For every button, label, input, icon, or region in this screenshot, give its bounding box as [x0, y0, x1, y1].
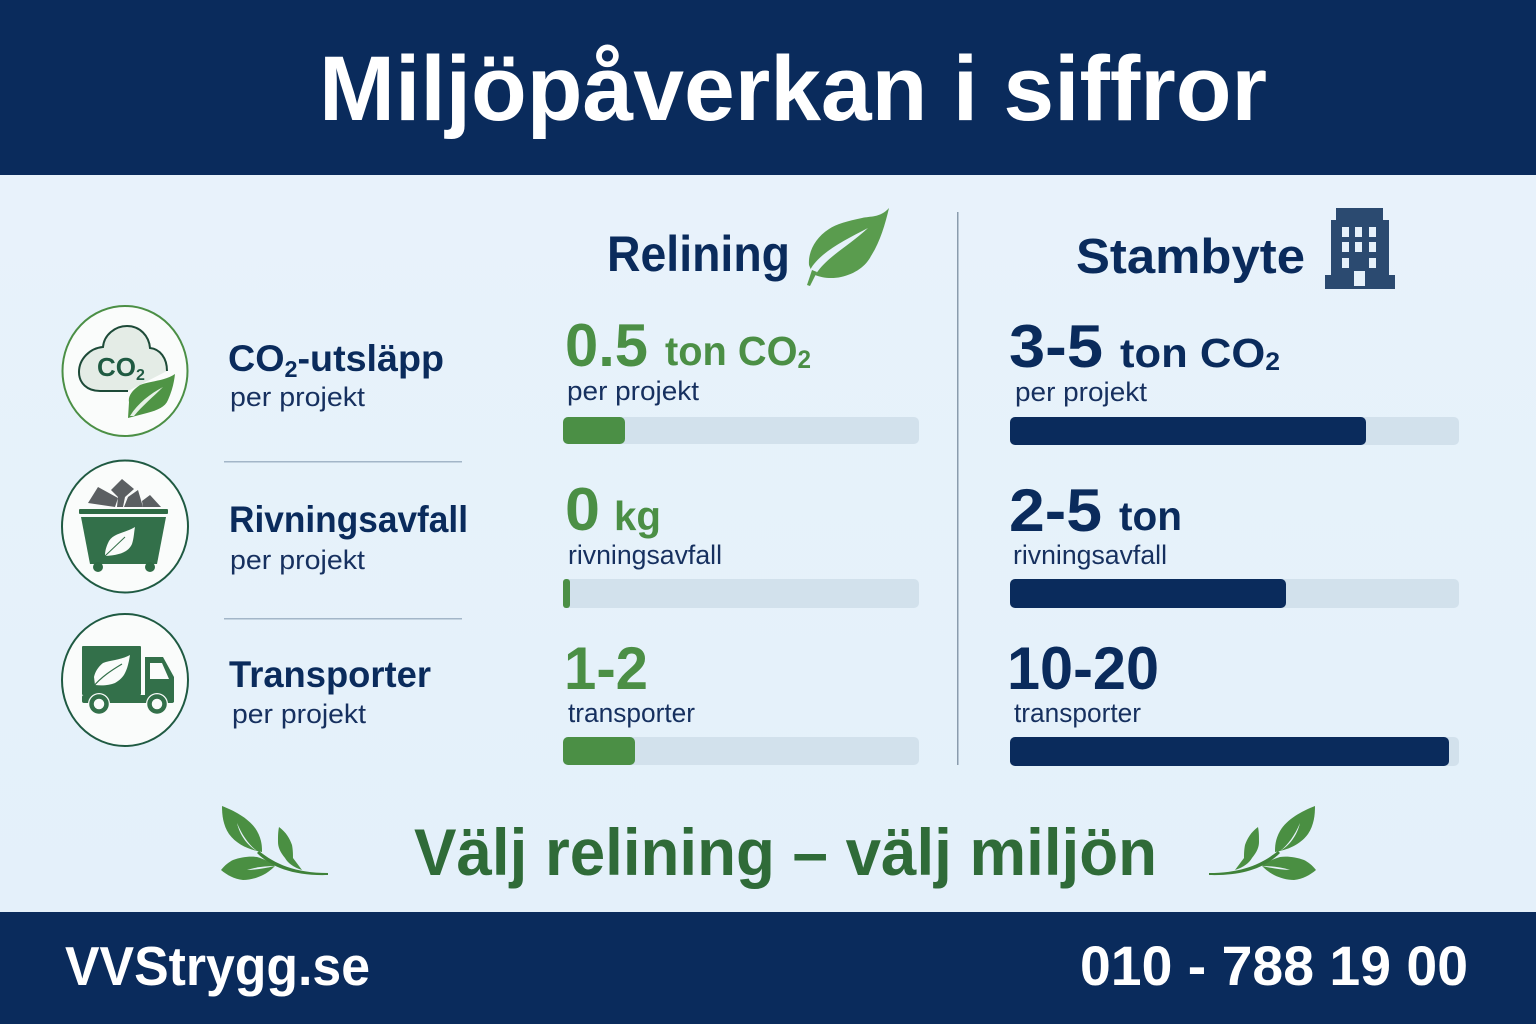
row: CO2 label — [62, 306, 444, 436]
icon: waste container — [62, 460, 188, 592]
value: 3-5 — [1009, 313, 1103, 380]
label: Transporter: Transporter — [229, 654, 431, 695]
unit: ton CO — [1120, 330, 1257, 376]
value: 0.5 — [565, 312, 648, 379]
bar fill — [1010, 737, 1449, 766]
caption: transporter — [568, 698, 695, 728]
icon: truck — [62, 614, 188, 746]
icon: CO2 cloud with leaf: 2 — [136, 367, 145, 384]
Stambyte: transport value and bar — [1007, 635, 1459, 766]
bar track — [563, 737, 919, 765]
column divider — [957, 212, 958, 765]
label: per projekt: per projekt — [232, 699, 367, 729]
icon: CO2 cloud with leaf — [62, 306, 188, 436]
bar track — [563, 579, 919, 608]
label: Rivningsavfall: Rivningsavfall — [229, 499, 468, 540]
row divider — [224, 461, 462, 462]
icon: right leaf sprig — [1209, 806, 1316, 880]
label: per projekt: per projekt — [230, 545, 366, 575]
footer band — [0, 912, 1536, 1024]
unit: kg — [614, 493, 661, 539]
website: VVStrygg.se — [65, 935, 370, 997]
icon: left leaf sprig — [221, 806, 328, 880]
row: Rivningsavfall label — [62, 460, 468, 592]
title: Miljöpåverkan i siffror — [319, 38, 1267, 140]
bar track — [1010, 417, 1459, 445]
icon: leaf — [807, 208, 889, 286]
value: 1-2 — [564, 635, 648, 702]
phone number: 010 - 788 19 00 — [1080, 934, 1468, 997]
slogan: Välj relining – välj miljön — [414, 815, 1157, 889]
value: 2-5 — [1009, 477, 1102, 544]
caption: rivningsavfall — [1013, 540, 1167, 570]
value: 0 — [565, 476, 600, 543]
Stambyte: CO2 value and bar — [1009, 313, 1459, 445]
caption: transporter — [1014, 698, 1141, 728]
caption: rivningsavfall — [568, 540, 722, 570]
column heading: Relining — [607, 208, 889, 286]
caption: per projekt — [567, 376, 700, 406]
icon: building — [1325, 208, 1395, 289]
bar track — [1010, 737, 1459, 766]
bar fill — [563, 579, 570, 608]
unit: ton — [1119, 493, 1182, 539]
label: per projekt: per projekt — [230, 382, 366, 412]
Relining: CO2 value and bar — [563, 312, 919, 444]
title banner — [0, 0, 1536, 175]
row: Transporter label — [62, 614, 431, 746]
Relining: waste value and bar — [563, 476, 919, 608]
value: 10-20 — [1007, 635, 1159, 702]
bar track — [563, 417, 919, 444]
bar fill — [1010, 417, 1366, 445]
label: CO2-utsläpp: CO — [228, 338, 284, 379]
bar track — [1010, 579, 1459, 608]
unit: 2 — [1265, 348, 1280, 376]
bar fill — [1010, 579, 1286, 608]
Relining: transport value and bar — [563, 635, 919, 765]
column heading: Relining: Relining — [607, 226, 790, 282]
icon: CO2 cloud with leaf: CO — [97, 352, 136, 382]
bar fill — [563, 737, 635, 765]
label: CO2-utsläpp: 2 — [284, 356, 298, 382]
bar fill — [563, 417, 625, 444]
unit: 2 — [798, 346, 811, 374]
label: CO2-utsläpp: -utsläpp — [298, 338, 444, 379]
unit: ton CO — [665, 328, 802, 374]
caption: per projekt — [1015, 377, 1148, 407]
Stambyte: waste value and bar — [1009, 477, 1459, 608]
column heading: Stambyte — [1076, 208, 1395, 289]
column heading: Stambyte: Stambyte — [1076, 230, 1305, 284]
row divider — [224, 618, 462, 620]
